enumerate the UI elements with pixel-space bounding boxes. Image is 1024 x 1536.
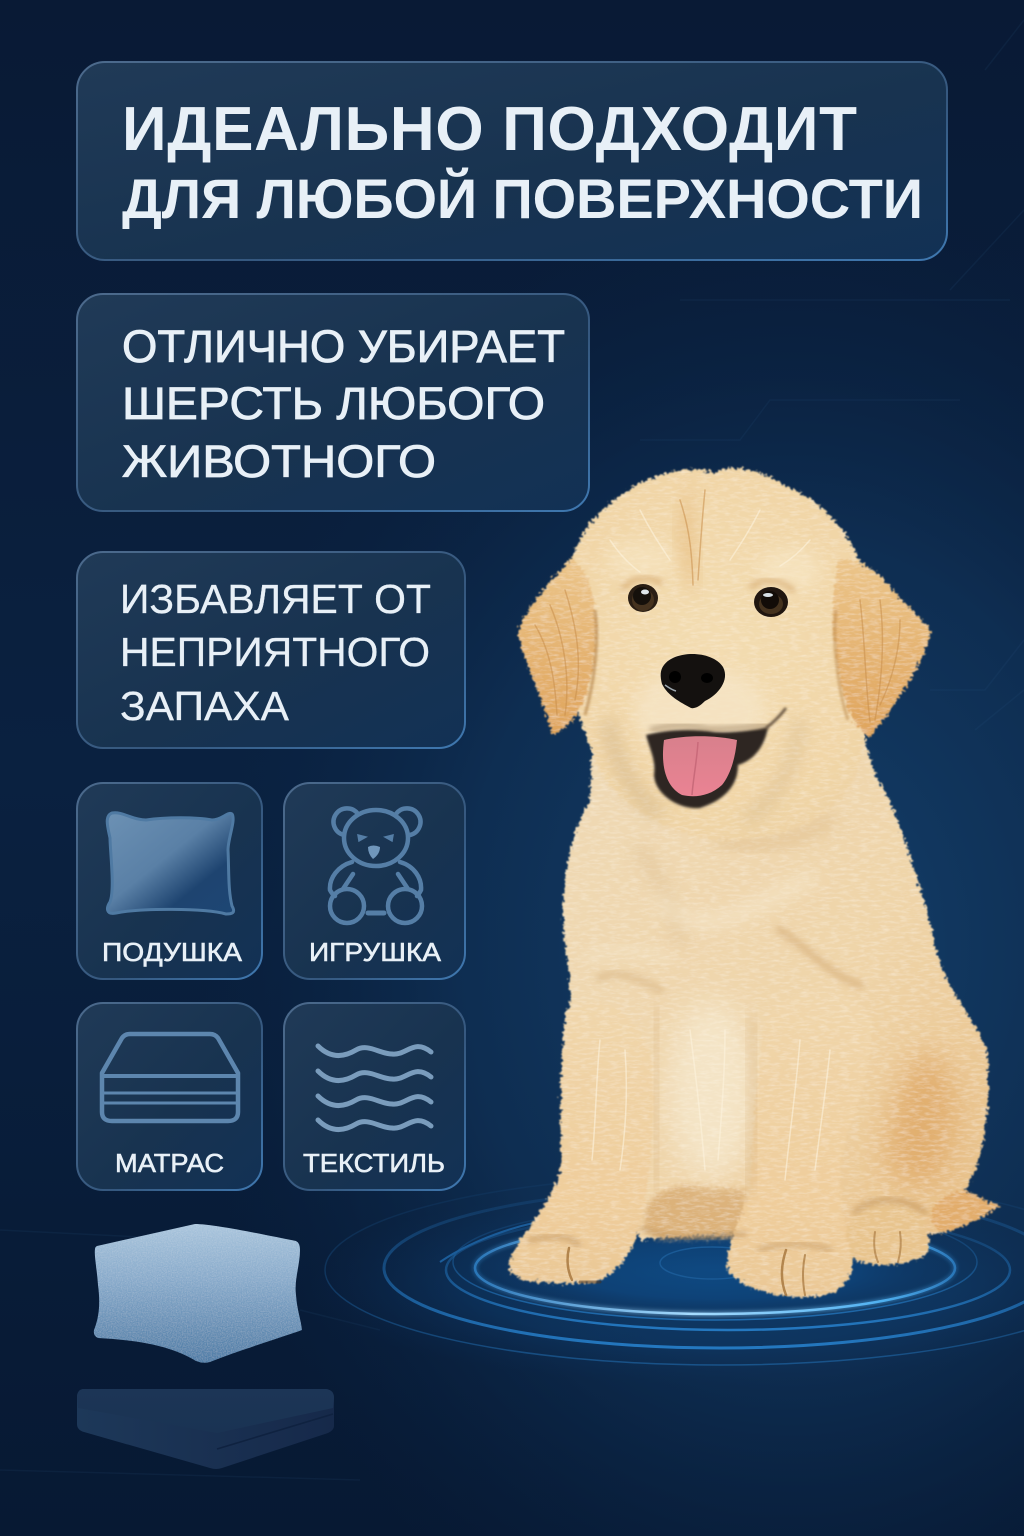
panel: removes fur	[77, 294, 589, 511]
label: pillow: ПОДУШКА	[102, 937, 243, 967]
dog head fur	[518, 468, 931, 840]
icon: mattress	[102, 1034, 238, 1121]
heading text: ИДЕАЛЬНО ПОДХОДИТ	[122, 95, 857, 164]
face shading	[585, 480, 848, 820]
mouth and tongue	[646, 708, 786, 808]
heading text: ДЛЯ ЛЮБОЙ ПОВЕРХНОСТИ	[122, 167, 923, 230]
tile: textile	[284, 1003, 465, 1190]
icon: pillow	[107, 813, 234, 914]
odor text: ИЗБАВЛЯЕТ ОТ	[120, 576, 431, 622]
chest shading	[590, 820, 925, 1237]
panel: main heading	[77, 62, 947, 260]
right ear	[833, 559, 931, 738]
icon: teddy bear	[330, 808, 422, 923]
left ear	[518, 558, 596, 735]
fur strands	[535, 490, 900, 1180]
label: toy: ИГРУШКА	[309, 937, 442, 967]
front left leg	[509, 1002, 653, 1283]
tile: toy	[284, 783, 465, 979]
dark fabric slab sample	[77, 1389, 334, 1469]
paw toes	[530, 1232, 913, 1295]
fur text: ШЕРСТЬ ЛЮБОГО	[122, 378, 545, 429]
dog body fur	[509, 690, 999, 1297]
puppy	[509, 468, 999, 1297]
eyes	[628, 584, 788, 617]
odor text: НЕПРИЯТНОГО	[120, 629, 430, 675]
fur text: ОТЛИЧНО УБИРАЕТ	[122, 321, 565, 372]
odor text: ЗАПАХА	[120, 683, 290, 729]
fabric cube sample	[94, 1224, 302, 1363]
tile: pillow	[77, 783, 262, 979]
nose	[661, 654, 725, 708]
label: mattress: МАТРАС	[115, 1148, 224, 1178]
rear paw	[846, 1202, 929, 1265]
icon: waves	[318, 1046, 431, 1130]
front right leg	[727, 990, 872, 1297]
floor rings	[310, 1175, 1024, 1385]
label: textile: ТЕКСТИЛЬ	[303, 1148, 445, 1178]
fur text: ЖИВОТНОГО	[122, 436, 436, 487]
tile: mattress	[77, 1003, 262, 1190]
panel: removes odor	[77, 552, 465, 748]
